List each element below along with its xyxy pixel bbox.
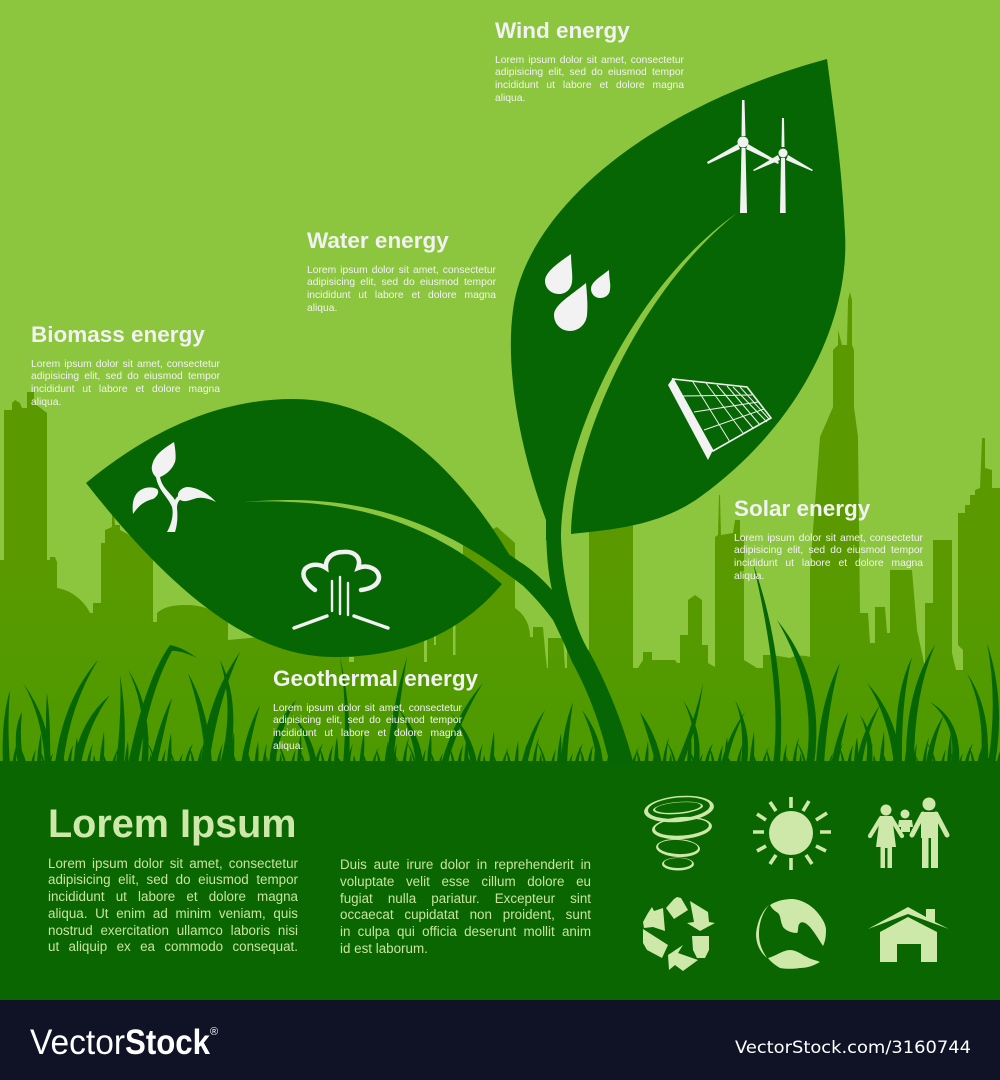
- short grass fringe: [0, 722, 1000, 767]
- text block: solar energy: Solar energy: [734, 496, 870, 521]
- text block: solar energy: [734, 496, 923, 582]
- text block: water energy: adipisicing elit, sed do eiusmod tempor: [307, 277, 496, 288]
- icon: solar panel: [668, 378, 771, 460]
- icon: wind turbines: [707, 100, 813, 213]
- paragraph: left column: aliqua. Ut enim ad minim veniam, quis: [48, 906, 298, 921]
- grass: [0, 563, 1000, 767]
- icon: globe: [756, 899, 826, 969]
- text block: wind energy: [495, 18, 684, 104]
- text block: geothermal energy: Geothermal energy: [273, 666, 478, 691]
- text block: wind energy: Wind energy: [495, 18, 630, 43]
- footer band: [0, 1000, 1000, 1080]
- text block: water energy: Lorem ipsum dolor sit amet, consectetur: [307, 264, 496, 276]
- text block: geothermal energy: incididunt ut labore et dolore magna: [273, 728, 462, 739]
- plant stem: [505, 515, 634, 765]
- text block: wind energy: Lorem ipsum dolor sit amet, consectetur: [495, 54, 684, 66]
- icon: biomass sprout: [133, 442, 216, 532]
- text block: geothermal energy: [273, 666, 478, 752]
- thin skyline slits behind the small leaf: [349, 620, 456, 662]
- paragraph: left column: adipisicing elit, sed do eiusmod tempor: [48, 872, 298, 887]
- paragraph: left column: Lorem ipsum dolor sit amet, consectetur: [48, 856, 298, 870]
- paragraph: right column: [340, 857, 591, 956]
- small leaf: [86, 399, 522, 657]
- tall grass blades: [3, 563, 999, 764]
- icon: house: [868, 907, 949, 962]
- text block: solar energy: aliqua.: [734, 571, 764, 582]
- footer logo: Vector: [30, 1023, 125, 1062]
- paragraph: left column: [48, 856, 298, 954]
- text block: water energy: aliqua.: [307, 303, 337, 314]
- city skyline silhouette: [0, 292, 1000, 780]
- paragraph: right column: occaecat cupidatat non proident, sunt: [340, 907, 591, 922]
- footer logo: Stock: [125, 1023, 210, 1062]
- icon: sun: [753, 797, 831, 870]
- text block: wind energy: adipisicing elit, sed do eiusmod tempor: [495, 67, 684, 78]
- text block: wind energy: incididunt ut labore et dolore magna: [495, 80, 684, 91]
- icon: geothermal steam: [294, 552, 388, 628]
- icon: recycling arrows: [643, 897, 715, 971]
- text block: geothermal energy: Lorem ipsum dolor sit amet, consectetur: [273, 702, 462, 714]
- icon: family: [870, 798, 947, 868]
- paragraph: right column: voluptate velit esse cillum dolore eu: [340, 874, 591, 889]
- footer logo: ®: [210, 1026, 218, 1038]
- paragraph: right column: Duis aute irure dolor in reprehenderit in: [340, 857, 591, 872]
- paragraph: left column: incididunt ut labore et dolore magna: [48, 889, 298, 904]
- background: [0, 0, 1000, 800]
- text block: biomass energy: Lorem ipsum dolor sit amet, consectetur: [31, 358, 220, 370]
- paragraph: right column: id est laborum.: [340, 941, 428, 956]
- paragraph: right column: in culpa qui officia deserunt mollit anim: [340, 924, 591, 939]
- paragraph: left column: nostrud exercitation ullamco laboris nisi: [48, 923, 298, 938]
- paragraph: right column: fugiat nulla pariatur. Excepteur sint: [340, 891, 591, 906]
- text block: water energy: Water energy: [307, 228, 449, 253]
- text block: solar energy: incididunt ut labore et dolore magna: [734, 558, 923, 569]
- icon: water drops: [545, 254, 610, 331]
- text block: biomass energy: incididunt ut labore et dolore magna: [31, 384, 220, 395]
- icon: tornado: [643, 793, 715, 870]
- text block: biomass energy: aliqua.: [31, 397, 61, 408]
- footer image id: VectorStock.com/3160744: [735, 1038, 971, 1058]
- paragraph: left column: ut aliquip ex ea commodo consequat.: [48, 939, 298, 954]
- text block: geothermal energy: aliqua.: [273, 741, 303, 752]
- text block: solar energy: Lorem ipsum dolor sit amet, consectetur: [734, 532, 923, 544]
- text block: solar energy: adipisicing elit, sed do eiusmod tempor: [734, 545, 923, 556]
- text block: water energy: [307, 228, 496, 314]
- text block: wind energy: aliqua.: [495, 93, 525, 104]
- bottom panel: [0, 761, 1000, 1000]
- text block: biomass energy: [31, 322, 220, 408]
- main heading: Lorem Ipsum: [48, 802, 297, 846]
- plant: [86, 59, 845, 765]
- footer logo: [30, 1023, 218, 1062]
- text block: biomass energy: Biomass energy: [31, 322, 205, 347]
- text block: water energy: incididunt ut labore et dolore magna: [307, 290, 496, 301]
- big leaf: [511, 59, 845, 550]
- text block: geothermal energy: adipisicing elit, sed do eiusmod tempor: [273, 715, 462, 726]
- text block: biomass energy: adipisicing elit, sed do eiusmod tempor: [31, 371, 220, 382]
